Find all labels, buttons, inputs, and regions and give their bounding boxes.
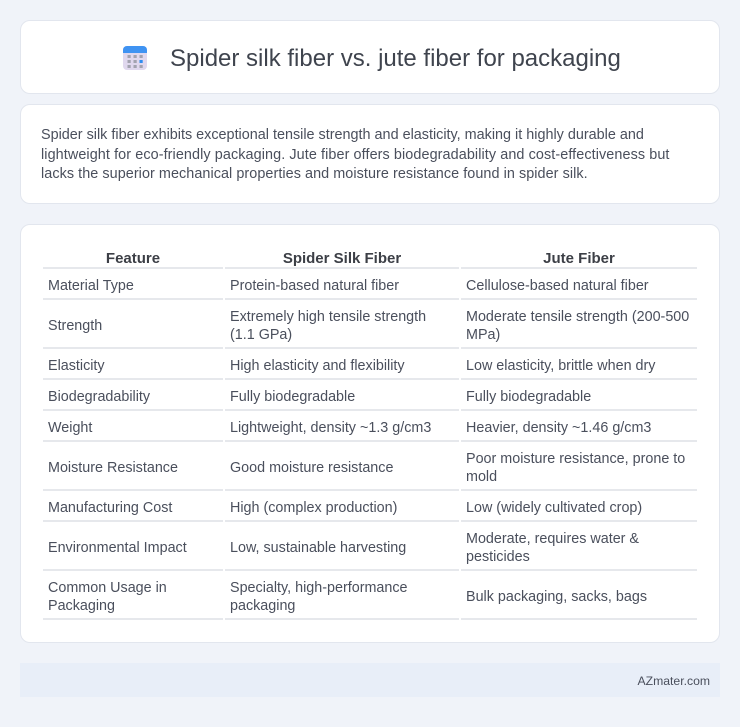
comparison table: Good moisture resistance [230, 460, 393, 476]
footer bar [20, 663, 720, 697]
comparison table: Jute Fiber [543, 250, 615, 267]
summary paragraph: lightweight for eco-friendly packaging. Jute fiber offers biodegradability and cost-effectiveness but [41, 147, 670, 163]
comparison table: Lightweight, density ~1.3 g/cm3 [230, 420, 431, 436]
comparison table: Specialty, high-performance [230, 580, 408, 596]
panel: summary text [20, 104, 720, 204]
comparison table: Extremely high tensile strength [230, 308, 426, 324]
comparison table: Bulk packaging, sacks, bags [466, 588, 647, 604]
comparison table: Fully biodegradable [230, 388, 355, 404]
comparison table: mold [466, 468, 497, 484]
summary paragraph [41, 127, 670, 182]
comparison table: High elasticity and flexibility [230, 358, 405, 374]
footer credit: AZmater.com [638, 674, 710, 688]
comparison table: MPa) [466, 326, 500, 342]
comparison table: Low, sustainable harvesting [230, 540, 406, 556]
comparison table: Poor moisture resistance, prone to [466, 450, 685, 466]
comparison table: Environmental Impact [48, 540, 187, 556]
comparison table: packaging [230, 598, 295, 614]
summary paragraph: Spider silk fiber exhibits exceptional tensile strength and elasticity, making it highly durable and [41, 127, 644, 143]
summary paragraph: lacks the superior mechanical properties and moisture resistance found in spider silk. [41, 166, 588, 182]
comparison table: Cellulose-based natural fiber [466, 278, 649, 294]
comparison table: Elasticity [48, 358, 105, 374]
panel: comparison table [20, 224, 720, 643]
icon: calendar [123, 46, 147, 70]
comparison table: pesticides [466, 548, 530, 564]
comparison table: High (complex production) [230, 500, 397, 516]
comparison table: Moderate, requires water & [466, 530, 639, 546]
comparison table: Feature [106, 250, 160, 267]
comparison table: Manufacturing Cost [48, 500, 172, 516]
comparison table: Protein-based natural fiber [230, 278, 399, 294]
comparison table: Common Usage in [48, 580, 167, 596]
title card [20, 20, 720, 94]
comparison table: Heavier, density ~1.46 g/cm3 [466, 420, 651, 436]
comparison table: Biodegradability [48, 388, 150, 404]
comparison table: (1.1 GPa) [230, 326, 292, 342]
comparison table: Packaging [48, 598, 115, 614]
title: Spider silk fiber vs. jute fiber for packaging [170, 45, 621, 72]
comparison table [43, 250, 697, 620]
comparison table: Low (widely cultivated crop) [466, 500, 642, 516]
comparison table: Moderate tensile strength (200-500 [466, 308, 689, 324]
comparison table: Material Type [48, 278, 134, 294]
comparison table: Moisture Resistance [48, 460, 178, 476]
comparison table: Strength [48, 318, 102, 334]
comparison table: Weight [48, 420, 92, 436]
comparison table: Low elasticity, brittle when dry [466, 358, 655, 374]
comparison table: Spider Silk Fiber [283, 250, 401, 267]
comparison table: Fully biodegradable [466, 388, 591, 404]
